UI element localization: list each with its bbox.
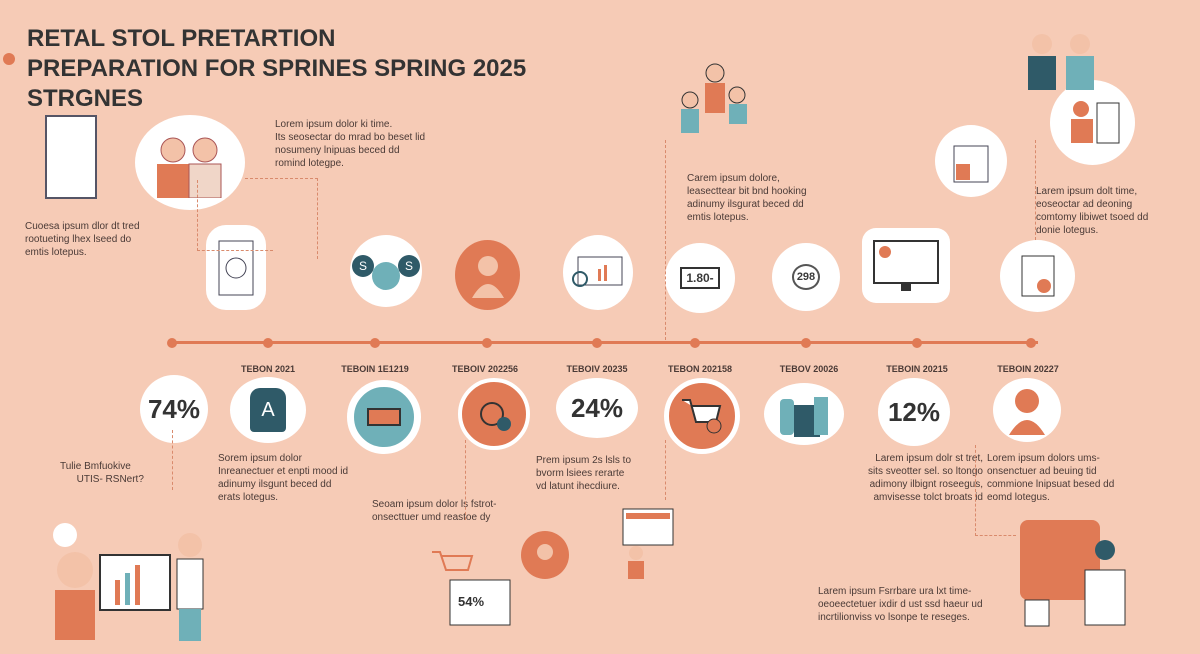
- dashed connectors: [197, 180, 273, 251]
- text: sits sveotter sel. so ltongo: [868, 466, 983, 477]
- title: STRGNES: [27, 85, 143, 112]
- text block left: emtis lotepus.: [25, 247, 87, 258]
- text: Prem ipsum 2s lsls to: [536, 455, 631, 466]
- bottom right illustration: [1020, 520, 1126, 626]
- text block center: [687, 173, 807, 223]
- bottom left illustration: [53, 523, 204, 641]
- text block right: comtomy libiwet tsoed dd: [1036, 212, 1148, 223]
- text: bvorm lsiees rerarte: [536, 468, 624, 479]
- text: TEBOIN 20215: [886, 364, 948, 374]
- text: onsecttuer umd reastoe dy: [372, 512, 490, 523]
- text: Tulie Bmfuokive: [60, 461, 131, 472]
- text: UTIS- RSNert?: [77, 474, 144, 485]
- text: TEBON 202158: [668, 364, 732, 374]
- bottom circles: [140, 375, 208, 443]
- text block left: rootueting lhex lseed do: [25, 234, 131, 245]
- text: 24%: [571, 392, 623, 422]
- text: TEBOIN 20227: [997, 364, 1059, 374]
- bottom text blocks: erats lotegus.: [218, 492, 278, 503]
- text: amvisesse tolct broats id: [874, 492, 983, 503]
- text block right: eoseoctar ad deoning: [1036, 199, 1132, 210]
- top icon row: [206, 225, 266, 310]
- people top center: [681, 64, 747, 133]
- timeline: [170, 341, 1038, 344]
- text: TEBOV 20026: [780, 364, 838, 374]
- icon: document with hand: [45, 115, 97, 199]
- text: 12%: [888, 396, 940, 426]
- text block top: [275, 119, 425, 169]
- text: eomd lotegus.: [987, 492, 1050, 503]
- text: 1.80-: [686, 271, 714, 285]
- text block center: Carem ipsum dolore,: [687, 173, 780, 184]
- bottom text blocks: Inreanectuer et enpti mood id: [218, 466, 348, 477]
- text block top: Its seosectar do mrad bo beset lid: [275, 132, 425, 143]
- accent dot: [3, 53, 15, 65]
- text block left: Cuoesa ipsum dlor dt tred: [25, 221, 140, 232]
- text: Larem ipsum Fsrrbare ura lxt time-: [818, 586, 971, 597]
- circle: two people: [135, 115, 245, 210]
- text: vd latunt ihecdiure.: [536, 481, 620, 492]
- text block top: romind lotegpe.: [275, 158, 344, 169]
- text: onsenctuer ad beuing tid: [987, 466, 1097, 477]
- text block right: donie lotegus.: [1036, 225, 1098, 236]
- bottom circles: 74%: [148, 394, 200, 424]
- text: Larem ipsum dolr st tret,: [875, 453, 983, 464]
- text block center: emtis lotepus.: [687, 212, 749, 223]
- text: oeoeectetuer ixdir d ust ssd haeur ud: [818, 599, 983, 610]
- text: TEBOIV 202256: [452, 364, 518, 374]
- text: TEBOIV 20235: [566, 364, 628, 374]
- text: TEBOIN 1E1219: [341, 364, 409, 374]
- top-right illustration: [935, 125, 1007, 197]
- timeline labels: TEBON 2021: [241, 364, 295, 374]
- text block left: [25, 221, 140, 258]
- text: S: [359, 259, 367, 273]
- people top right: [1028, 34, 1094, 90]
- text: incrtilionviss vo lsonpe te reseges.: [818, 612, 970, 623]
- title: RETAL STOL PRETARTION: [27, 25, 335, 52]
- text: adimony ilbignt roseegus,: [870, 479, 983, 490]
- text: 298: [797, 271, 815, 283]
- text block right: Larem ipsum dolt time,: [1036, 186, 1137, 197]
- text: A: [261, 399, 275, 421]
- text: Seoam ipsum dolor ls fstrot-: [372, 499, 496, 510]
- bottom center illustration: 54%: [458, 594, 484, 609]
- bottom text blocks: [218, 453, 348, 503]
- text: S: [405, 259, 413, 273]
- text block right: [1036, 186, 1148, 236]
- title: PREPARATION FOR SPRINES SPRING 2025: [27, 55, 526, 82]
- text: commione lnipsuat besed dd: [987, 479, 1114, 490]
- text block center: leasecttear bit bnd hooking: [687, 186, 807, 197]
- bottom center illustration: [432, 531, 569, 626]
- bottom text blocks: adinumy ilsgunt beced dd: [218, 479, 331, 490]
- bottom text blocks: Sorem ipsum dolor: [218, 453, 302, 464]
- text block center: adinumy ilsgurat beced dd: [687, 199, 804, 210]
- text block top: Lorem ipsum dolor ki time.: [275, 119, 392, 130]
- text: Lorem ipsum dolors ums-: [987, 453, 1100, 464]
- text block top: nosumeny lnipuas beced dd: [275, 145, 400, 156]
- title: [27, 25, 526, 112]
